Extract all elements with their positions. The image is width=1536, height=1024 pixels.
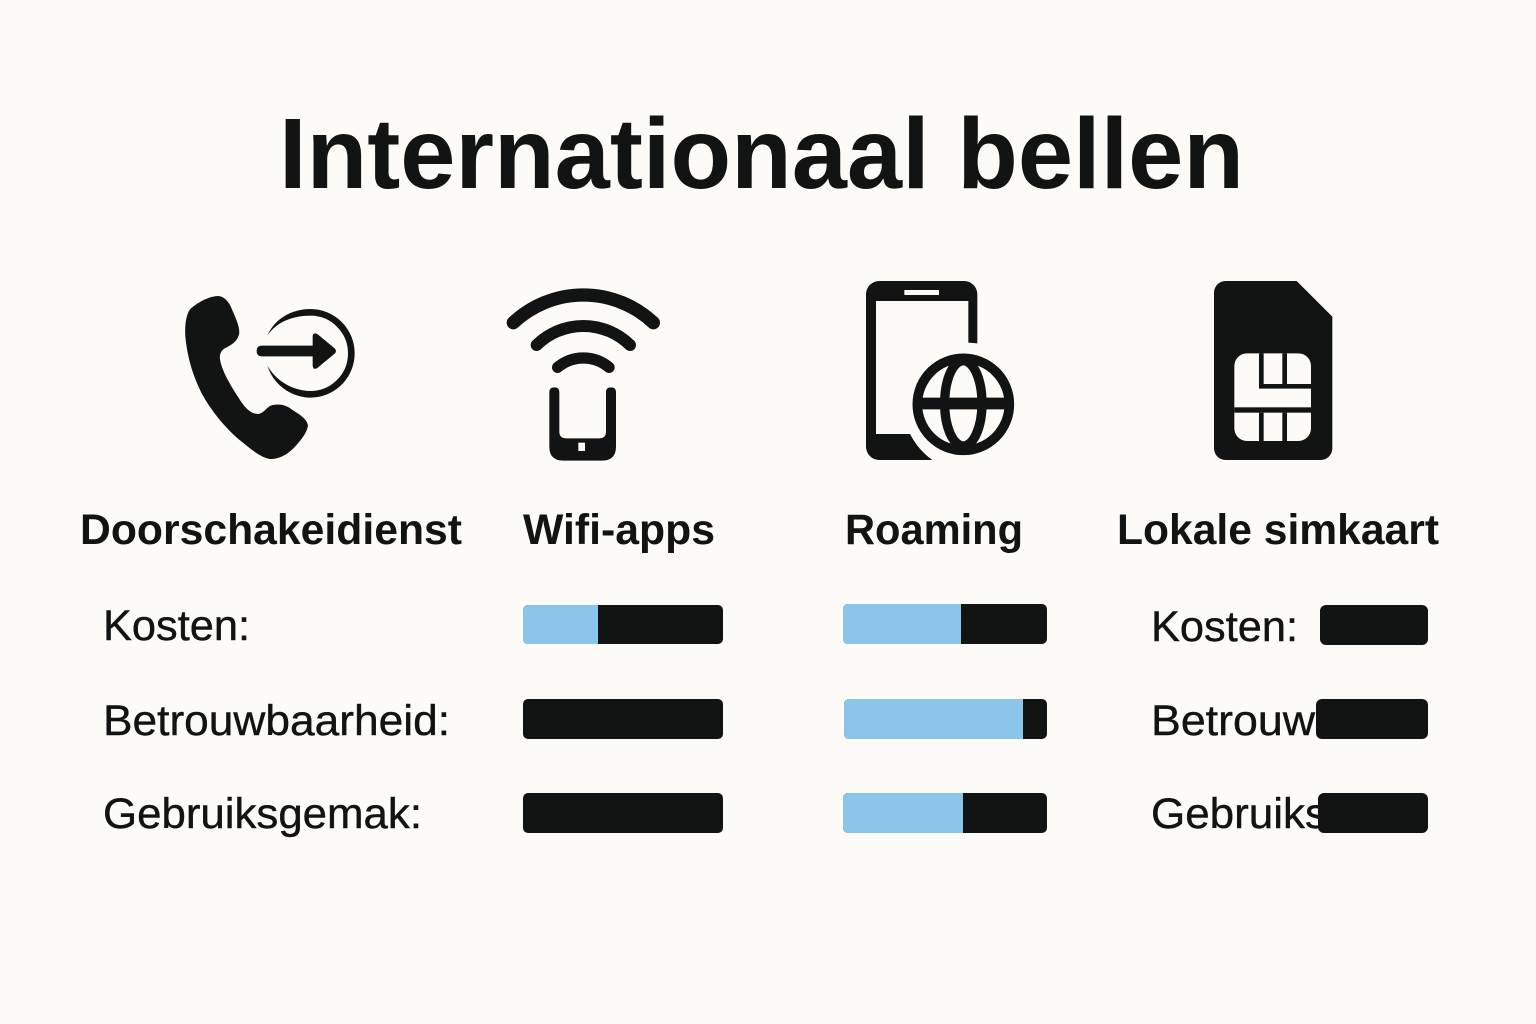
label: Betrouw (simkaart): Betrouw (1151, 697, 1316, 745)
icon: smartphone with globe (866, 281, 1009, 460)
heading: Roaming: Roaming (845, 506, 1023, 554)
bar: simkaart kosten (1320, 605, 1428, 645)
label: Betrouwbaarheid: Betrouwbaarheid: (103, 697, 450, 745)
bar: Wifi-apps kosten (523, 605, 723, 644)
heading: Wifi-apps: Wifi-apps (523, 506, 715, 554)
bar: Roaming betrouwbaarheid (844, 699, 1047, 739)
bar: Wifi-apps betrouwbaarheid (523, 699, 723, 739)
label: Gebruiksgemak: Gebruiksgemak: (103, 790, 422, 838)
label: Gebruiks (simkaart): Gebruiks (1151, 790, 1327, 838)
heading: Doorschakeidienst: Doorschakeidienst (80, 506, 462, 554)
bar: Wifi-apps gebruiksgemak (523, 793, 723, 833)
bar: Roaming kosten (843, 604, 1047, 644)
icon: SIM card (1214, 281, 1332, 460)
bar: simkaart betrouwbaarheid (1316, 699, 1428, 739)
label: Kosten: Kosten: (103, 602, 250, 650)
bar: Roaming gebruiksgemak (843, 793, 1047, 833)
label: Kosten (simkaart): Kosten: (1151, 603, 1298, 651)
heading: Lokale simkaart: Lokale simkaart (1117, 506, 1439, 554)
bar: simkaart gebruiksgemak (1318, 793, 1428, 833)
icon: phone with forward arrow (185, 296, 351, 459)
title: Internationaal bellen (279, 98, 1244, 210)
icon: wifi with phone (513, 295, 653, 461)
